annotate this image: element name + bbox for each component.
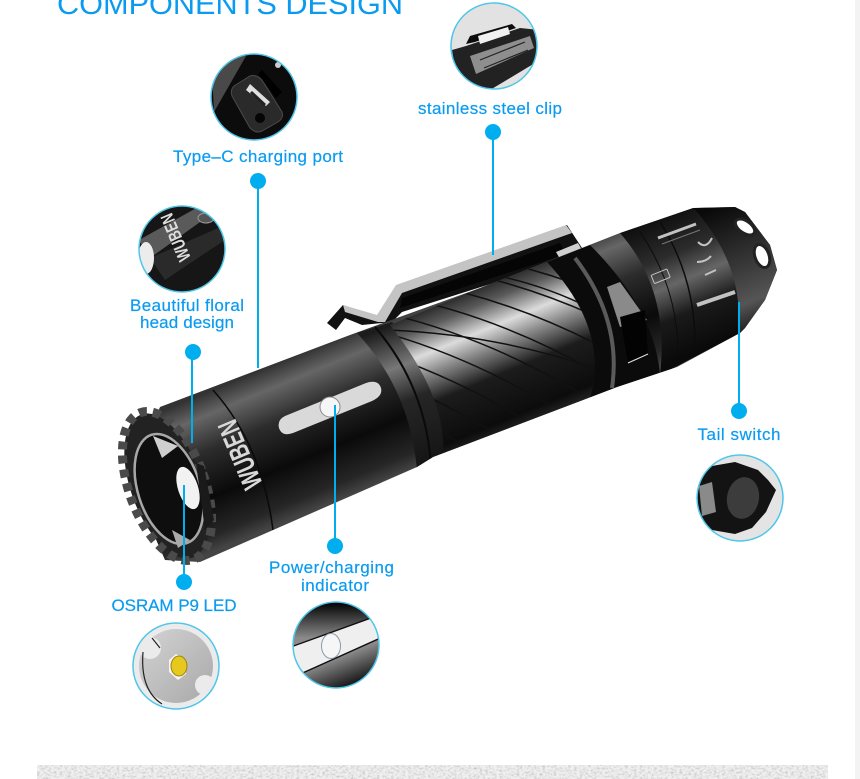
grip grooves xyxy=(394,268,592,406)
callout: Power/charging indicator xyxy=(269,405,394,690)
callout: Tail switch: Tail switch xyxy=(698,425,780,444)
tail tube xyxy=(620,208,740,375)
head tube xyxy=(156,207,777,562)
icon: tail switch photo xyxy=(697,455,783,541)
flashlight xyxy=(105,200,790,572)
callout: Beautiful floral head design: head design xyxy=(140,313,234,332)
icon: clip photo xyxy=(450,2,540,90)
icon: indicator photo xyxy=(294,602,378,688)
tail holes xyxy=(733,216,773,270)
callout: Power/charging indicator: Power/charging xyxy=(269,558,394,577)
callout: Type-C charging port: Type–C charging port xyxy=(173,147,343,166)
callout: Tail switch xyxy=(697,302,783,541)
callout: stainless steel clip: stainless steel clip xyxy=(418,99,562,118)
icon: charging port photo xyxy=(210,54,298,142)
callout: Power/charging indicator: indicator xyxy=(301,576,369,595)
callout: OSRAM P9 LED xyxy=(112,485,236,709)
collar ring xyxy=(357,322,445,470)
body xyxy=(156,207,777,562)
icon: head photo xyxy=(138,206,225,292)
brand mark: WUBEN xyxy=(212,415,269,494)
textured bottom band xyxy=(37,765,828,779)
callout: OSRAM P9 LED: OSRAM P9 LED xyxy=(112,596,236,615)
icon: LED photo xyxy=(133,623,219,709)
callout: Beautiful floral head design xyxy=(130,206,244,443)
pocket clip xyxy=(327,225,582,330)
grip section xyxy=(390,262,595,455)
dark ring xyxy=(547,245,660,398)
tail markings xyxy=(651,224,735,305)
icon: head photo: WUBEN xyxy=(157,210,195,264)
head bezel xyxy=(105,400,229,572)
indicator slot xyxy=(279,382,381,434)
head seam xyxy=(213,390,273,530)
tail crown xyxy=(693,207,777,333)
callout: Beautiful floral head design: Beautiful floral xyxy=(130,296,244,315)
callout: stainless steel clip xyxy=(418,2,562,255)
callout: Type-C charging port xyxy=(173,54,343,368)
page edge strip xyxy=(855,0,860,779)
lens xyxy=(122,425,216,553)
